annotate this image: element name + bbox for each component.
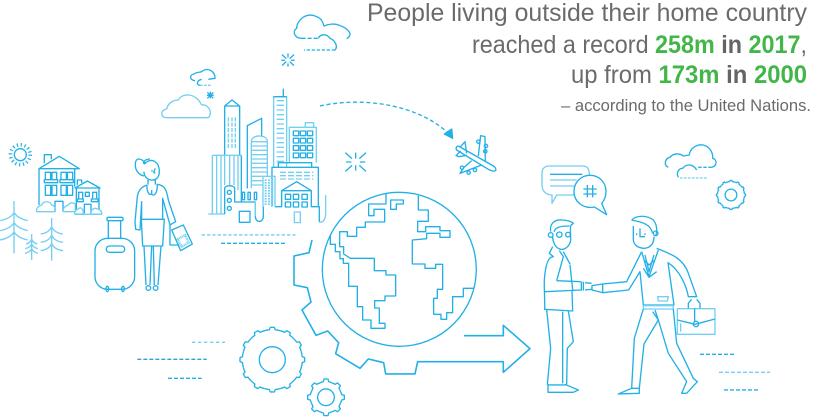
- icon: sparkle: [345, 153, 366, 171]
- city skyline, clouds and sparkles: [162, 15, 350, 223]
- icon: small cloud: [191, 70, 215, 85]
- building: round tower: [251, 136, 267, 188]
- figure: woman traveller: [135, 159, 192, 290]
- building: mid block: [272, 163, 318, 207]
- heading: migration statistic: [367, 0, 811, 115]
- building: foreground block and house: [225, 155, 326, 223]
- figure: man with glasses: [544, 220, 592, 392]
- icon: speech bubble hash: [574, 175, 607, 215]
- handshake scene: [542, 145, 770, 394]
- icon: gear large: [240, 327, 305, 392]
- building: small tower: [263, 176, 275, 207]
- continents: europe and africa: [412, 196, 474, 319]
- icon: speech bubble lines: [542, 166, 589, 203]
- icon: pine trees: [0, 201, 63, 261]
- icon: upper cloud: [294, 15, 350, 50]
- icon: cloud right: [665, 145, 716, 178]
- arrow: dotted flight path: [320, 102, 453, 138]
- dashes: lower left: [137, 342, 225, 378]
- dashes: right: [700, 354, 770, 390]
- continents: island: [391, 200, 403, 209]
- building: windowed block: [289, 123, 316, 163]
- heading: migration statistic: reached a record 258m in 2017,: [472, 31, 807, 59]
- icon: sun: [10, 145, 30, 164]
- icon: airplane: [456, 136, 496, 174]
- heading: migration statistic: up from 173m in 2000: [571, 61, 807, 89]
- icon: gear right: [716, 180, 746, 210]
- dashed line: below city light: [202, 233, 297, 237]
- building: tall tower: [274, 89, 287, 167]
- building: tower A: [225, 100, 240, 155]
- dashed line: below city dark: [221, 241, 287, 245]
- figure: man with briefcase: [592, 216, 697, 394]
- globe on gear with arrow: [240, 192, 530, 416]
- heading: migration statistic: – according to the United Nations.: [561, 97, 811, 115]
- icon: sparkle top: [281, 53, 295, 67]
- icon: left cloud: [162, 95, 210, 118]
- continents: americas: [330, 194, 396, 328]
- building: striped block: [208, 155, 241, 214]
- icon: gear small: [308, 379, 344, 416]
- icon: sparkle small: [207, 92, 214, 98]
- icon: small house: [75, 180, 102, 214]
- icon: briefcase: [677, 299, 715, 334]
- icon: suitcase: [95, 217, 135, 292]
- globe outline: [322, 192, 476, 346]
- village scene with sun, houses and trees: [0, 145, 192, 292]
- icon: large house: [37, 155, 79, 212]
- large gear and arrow outline: [294, 240, 530, 374]
- building: slanted tower: [247, 118, 262, 188]
- flight path, plane and sparkle: [320, 102, 496, 174]
